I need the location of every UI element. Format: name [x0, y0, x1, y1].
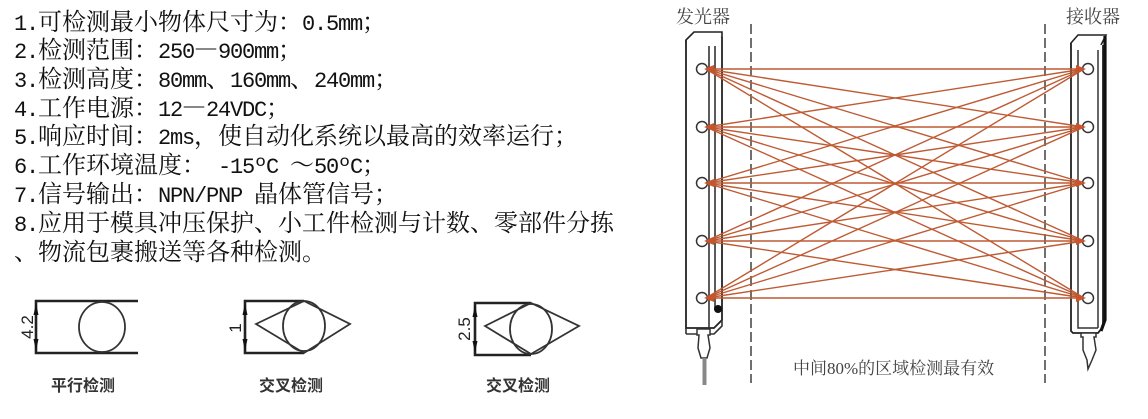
receiver bar — [1071, 35, 1106, 369]
diagram: cross detection 2 — [455, 303, 579, 395]
effective zone boundary left — [750, 24, 752, 383]
caption: cross detection: 交叉检测 — [486, 376, 550, 395]
receiver label: 接收器 — [1066, 7, 1120, 27]
spec line 9: 、物流包裹搬送等各种检测。 — [14, 232, 326, 267]
effective zone boundary right — [1044, 24, 1046, 383]
dimension 2.5: 2.5 — [455, 317, 474, 341]
crossing light beams — [706, 69, 1084, 298]
specification list — [14, 2, 615, 267]
spec line 5: 5.响应时间：2ms，使自动化系统以最高的效率运行； — [14, 116, 578, 151]
spec line 6: 6.工作环境温度： -15ºC ～50ºC； — [14, 145, 386, 180]
emitter label: 发光器 — [676, 7, 730, 27]
caption: parallel detection: 平行检测 — [51, 376, 115, 395]
spec line 4: 4.工作电源：12—24VDC； — [14, 88, 290, 123]
spec line 1: 1.可检测最小物体尺寸为：0.5mm； — [14, 2, 386, 37]
effective zone note: 中间80%的区域检测最有效 — [793, 359, 994, 378]
diagram: parallel detection — [18, 301, 138, 395]
spec line 3: 3.检测高度：80mm、160mm、240mm； — [14, 59, 398, 94]
emitter bar — [686, 32, 722, 385]
light curtain diagram — [676, 7, 1120, 385]
spec line 2: 2.检测范围：250—900mm； — [14, 30, 302, 65]
dimension 1: 1 — [226, 323, 245, 333]
caption: cross detection: 交叉检测 — [259, 376, 323, 395]
diagram: cross detection 1 — [226, 301, 350, 395]
beam convergence wedges — [704, 65, 1086, 302]
dimension 4.2: 4.2 — [18, 315, 37, 339]
spec line 7: 7.信号输出：NPN/PNP 晶体管信号； — [14, 174, 398, 209]
spec line 8: 8.应用于模具冲压保护、小工件检测与计数、零部件分拣 — [14, 203, 615, 238]
